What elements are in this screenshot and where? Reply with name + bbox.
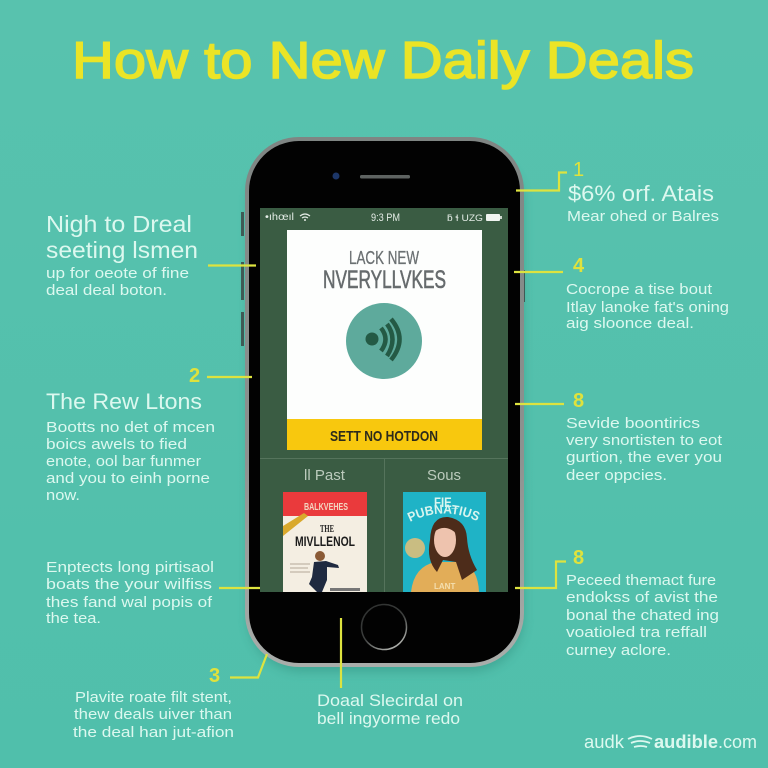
body text: [46, 265, 189, 299]
status bar: •ıhœıl: [265, 212, 294, 223]
body text: bonal the chated ing: [566, 607, 719, 624]
connector: [208, 264, 256, 267]
connector: [516, 172, 567, 190]
body text: [46, 419, 215, 504]
body text: boics awels to fied: [46, 436, 187, 453]
divider lines: [260, 458, 508, 592]
screen: [260, 208, 508, 592]
tab labels: [304, 467, 461, 484]
body text: Doaal Slecirdal on: [317, 691, 463, 710]
callout 8: services: [515, 390, 723, 484]
connector: [515, 562, 566, 588]
body text: [46, 559, 214, 627]
callout: home button: [317, 618, 463, 728]
body text: Cocrope a tise bout: [566, 281, 713, 298]
tab labels: ll Past: [304, 467, 346, 484]
body text: voatioled tra reffall: [566, 624, 707, 641]
body text: [566, 572, 719, 659]
book cover: Pubnatius: [403, 492, 486, 592]
heading: $6% orf. Atais: [568, 181, 714, 206]
book cover: The Millenol: [283, 492, 367, 592]
body text: and you to einh porne: [46, 470, 210, 487]
yellow button: [287, 419, 482, 450]
body text: [566, 281, 729, 332]
connector: [515, 403, 564, 405]
body text: thes fand wal popis of: [46, 594, 213, 611]
phone side buttons: [241, 212, 525, 346]
phone shadow: [248, 150, 524, 672]
body text: bell ingyorme redo: [317, 709, 460, 728]
phone body: [245, 137, 524, 667]
home button: [362, 604, 406, 650]
callout 4: [514, 255, 729, 332]
book cover: Pubnatius: LANT: [434, 582, 455, 591]
callout: book tips: [46, 559, 260, 627]
body text: Plavite roate filt stent,: [75, 689, 232, 706]
body text: boats the your wilfiss: [46, 576, 212, 593]
heading: Nigh to Dreal: [46, 211, 192, 237]
number: 2: [189, 365, 200, 387]
book cover: Pubnatius: FIE_: [434, 494, 458, 510]
callout 8: perceived: [515, 547, 719, 659]
front camera: [332, 172, 340, 180]
number: 4: [573, 255, 585, 277]
callout 3: preview: [73, 654, 267, 741]
connector: [340, 618, 342, 688]
body text: deer oppcies.: [566, 467, 667, 484]
body text: Sevide boontirics: [566, 415, 700, 432]
body text: endokss of avist the: [566, 589, 718, 606]
book cover: Pubnatius: PUBNATIUS: [407, 504, 480, 522]
number: 8: [573, 390, 584, 412]
body text: deal deal boton.: [46, 282, 167, 299]
body text: curney aclore.: [566, 642, 671, 659]
book cover: The Millenol: THE: [320, 524, 334, 535]
status bar: [265, 212, 502, 224]
body text: Bootts no det of mcen: [46, 419, 215, 436]
icon: audio circle: [346, 303, 422, 379]
body text: Peceed themact fure: [566, 572, 716, 589]
phone: [241, 137, 526, 674]
deal card: [287, 230, 482, 450]
body text: thew deals uiver than: [74, 706, 232, 723]
logo: audible: .com: [718, 732, 757, 752]
callout 1: percent off: [516, 159, 719, 225]
logo: audible: audk: [584, 732, 625, 752]
body text: enote, ool bar funmer: [46, 453, 201, 470]
book cover: The Millenol: MIVLLENOL: [295, 533, 355, 549]
body text: up for oeote of fine: [46, 265, 189, 282]
book cover: The Millenol: BALKVEHES: [304, 502, 348, 513]
body text: aig sloonce deal.: [566, 315, 694, 332]
heading: [46, 211, 198, 263]
body text: Mear ohed or Balres: [567, 208, 719, 225]
logo: audible: [584, 732, 757, 752]
heading: seeting lsmen: [46, 237, 198, 263]
yellow button: SETT NO HOTDON: [330, 428, 438, 445]
body text: [566, 415, 723, 484]
icon: signal waves: [628, 736, 652, 747]
number: 1: [573, 159, 584, 181]
deal card: NVERYLLVKES: [323, 266, 446, 294]
body text: [317, 691, 463, 728]
number: 8: [573, 547, 584, 569]
title: How to New Daily Deals: [72, 32, 694, 90]
body text: the deal han jut-afion: [73, 724, 234, 741]
body text: Itlay lanoke fat's oning: [566, 299, 729, 316]
connector: [219, 587, 260, 589]
speaker: [360, 175, 410, 178]
status bar: ƃ ɬ UZG: [447, 213, 483, 223]
body text: now.: [46, 487, 80, 504]
body text: the tea.: [46, 610, 101, 627]
tab labels: Sous: [427, 467, 461, 484]
body text: very snortisten to eot: [566, 432, 723, 449]
body text: gurtion, the ever you: [566, 449, 722, 466]
connector: [230, 654, 267, 678]
logo: audible: audible: [654, 732, 718, 752]
callout: deal search: [46, 211, 256, 299]
card heading: LACK NEW: [349, 248, 419, 268]
heading: The Rew Ltons: [46, 389, 202, 414]
number: 3: [209, 665, 220, 687]
connector: [207, 376, 252, 378]
connector: [514, 271, 563, 273]
callout 2: the new lions: [46, 365, 252, 504]
body text: Enptects long pirtisaol: [46, 559, 214, 576]
status bar: 9:3 PM: [371, 212, 400, 224]
body text: [73, 689, 234, 741]
